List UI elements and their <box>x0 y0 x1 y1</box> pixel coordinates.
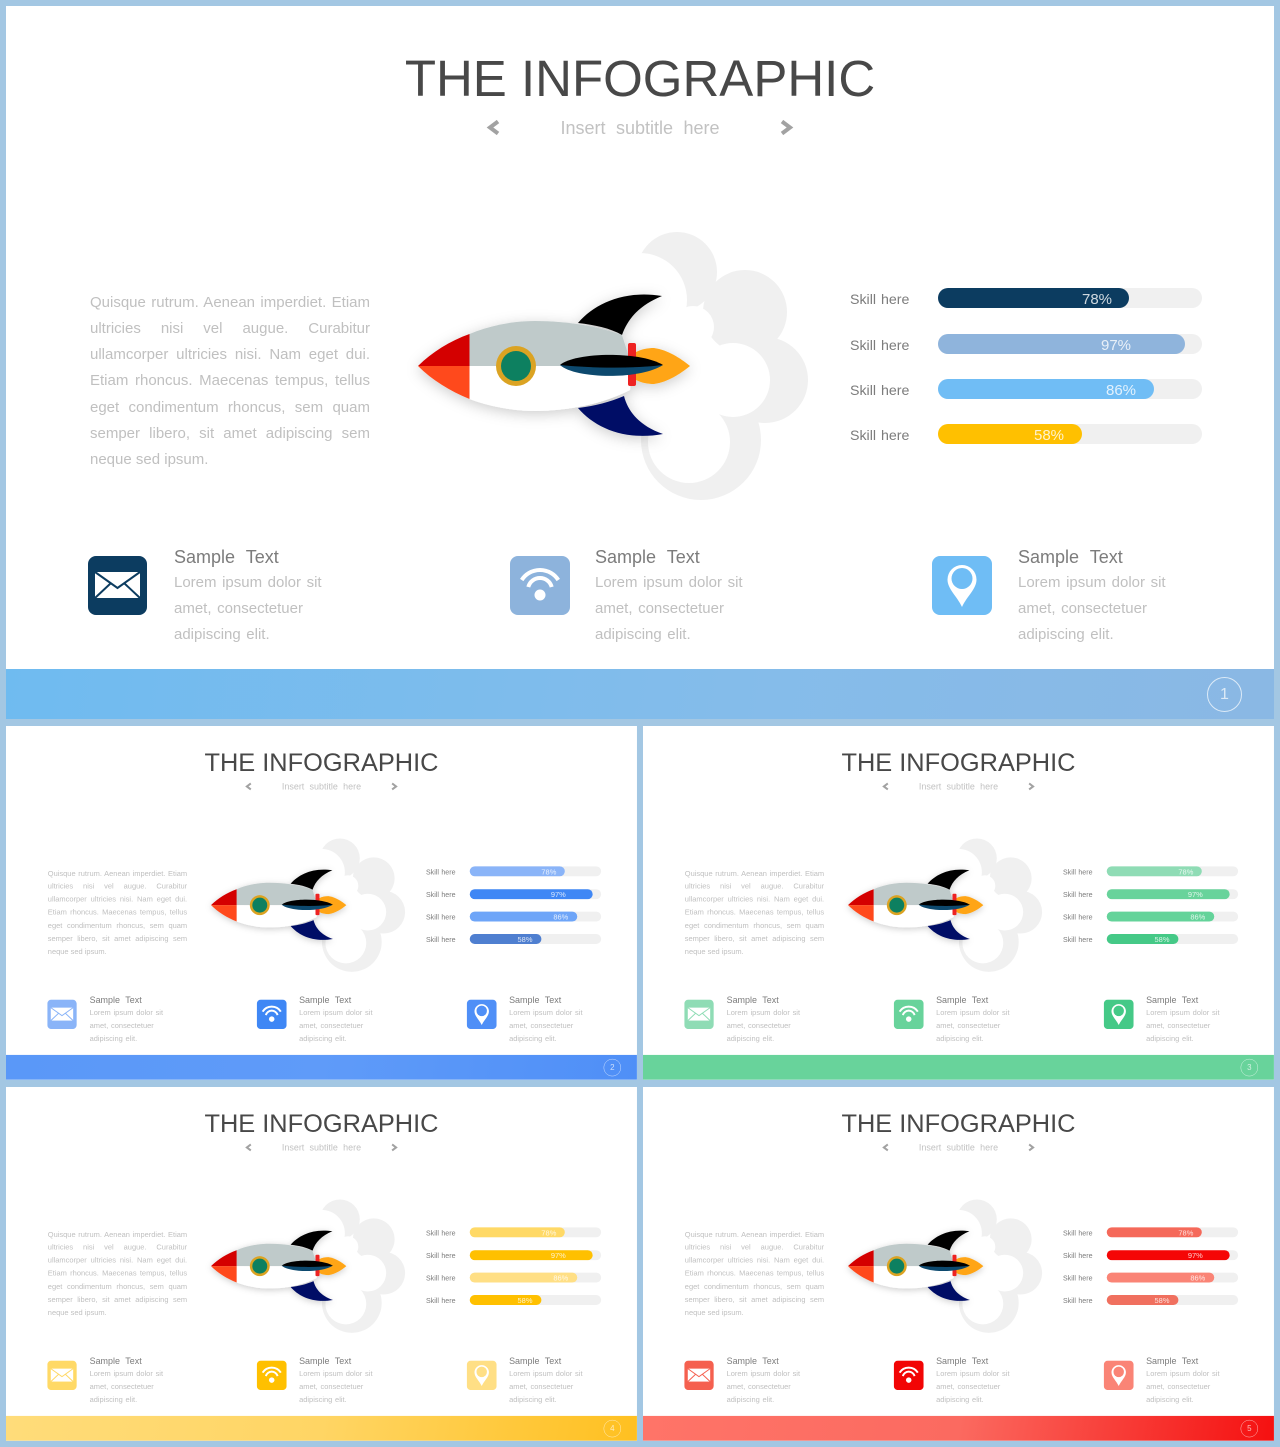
chart: skill bars: Skill here <box>1063 868 1093 876</box>
feature: mail: amet, consectetuer <box>174 600 303 617</box>
text block: intro paragraph: eget condimentum rhoncus, sem quam <box>685 1282 824 1291</box>
text block: intro paragraph: neque sed ipsum. <box>90 451 208 468</box>
text block: intro paragraph: Quisque rutrum. Aenean imperdiet. Etiam <box>685 1230 824 1239</box>
text block: intro paragraph: Etiam rhoncus. Maecenas tempus, tellus <box>685 1269 824 1278</box>
feature: location: amet, consectetuer <box>1146 1022 1210 1030</box>
subtitle: Insert subtitle here <box>560 118 720 138</box>
chart: skill bars: 58% <box>1155 935 1169 944</box>
chart: skill bars: 97% <box>551 1252 566 1260</box>
footer band with page number: 5 <box>1247 1424 1252 1433</box>
feature: wifi: adipiscing elit. <box>936 1035 984 1043</box>
feature: mail: amet, consectetuer <box>727 1383 791 1391</box>
footer band with page number: 1 <box>1220 686 1229 703</box>
feature: wifi <box>894 995 1010 1043</box>
title: THE INFOGRAPHIC <box>841 1109 1075 1137</box>
feature: location: Sample Text <box>1146 995 1198 1005</box>
feature: location: Lorem ipsum dolor sit <box>509 1009 583 1017</box>
feature: wifi <box>256 995 373 1043</box>
feature: location: amet, consectetuer <box>509 1022 573 1030</box>
text block: intro paragraph <box>48 869 187 956</box>
icon: envelope <box>47 1000 77 1029</box>
text block: intro paragraph: ultricies nisi vel augue. Curabitur <box>48 1243 187 1252</box>
text block: intro paragraph <box>685 869 824 956</box>
text block: intro paragraph: Etiam rhoncus. Maecenas tempus, tellus <box>90 372 370 389</box>
chart: skill bars: 58% <box>518 935 532 944</box>
chart: skill bars: Skill here <box>1063 1275 1093 1283</box>
text block: intro paragraph: semper libero, sit amet adipiscing sem <box>48 1295 187 1304</box>
feature: wifi: adipiscing elit. <box>595 626 691 643</box>
feature: location: Sample Text <box>509 1356 561 1366</box>
panel: red slide 5 <box>643 1087 1274 1441</box>
feature: mail: Lorem ipsum dolor sit <box>727 1370 800 1378</box>
chart: skill bars: 58% <box>518 1296 532 1305</box>
text block: intro paragraph: Quisque rutrum. Aenean imperdiet. Etiam <box>48 869 187 878</box>
feature: mail: amet, consectetuer <box>90 1383 154 1391</box>
chart: skill bars <box>426 866 601 944</box>
icon: pin <box>1104 1361 1134 1390</box>
panel: main slide 1 <box>6 6 1274 719</box>
footer band with page number: 4 <box>610 1424 615 1433</box>
feature: wifi: Lorem ipsum dolor sit <box>299 1370 373 1378</box>
feature: mail: Lorem ipsum dolor sit <box>727 1009 800 1017</box>
feature: location: adipiscing elit. <box>1018 626 1114 643</box>
footer band with page number <box>6 1416 637 1441</box>
text block: intro paragraph: eget condimentum rhoncus, sem quam <box>48 1282 187 1291</box>
text block: intro paragraph: Etiam rhoncus. Maecenas tempus, tellus <box>48 1269 187 1278</box>
feature: location: amet, consectetuer <box>509 1383 573 1391</box>
chart: skill bars: 58% <box>1034 427 1064 444</box>
chart: skill bars: 78% <box>541 1229 556 1237</box>
text block: intro paragraph <box>90 294 370 468</box>
icon: wifi <box>256 1000 287 1029</box>
chart: skill bars: 97% <box>1188 891 1203 899</box>
footer band with page number: 2 <box>610 1063 615 1072</box>
feature: location <box>466 1356 583 1404</box>
feature: mail <box>47 995 163 1043</box>
feature: location <box>466 995 583 1043</box>
text block: intro paragraph: ullamcorper ultricies nisi. Nam eget dui. <box>48 895 187 904</box>
illustration: rocket with cloud <box>847 838 1042 972</box>
feature: mail: Sample Text <box>90 1356 142 1366</box>
title: THE INFOGRAPHIC <box>204 1109 438 1137</box>
feature: wifi: Lorem ipsum dolor sit <box>299 1009 373 1017</box>
chart: skill bars: Skill here <box>850 428 909 444</box>
feature: mail: Lorem ipsum dolor sit <box>174 574 322 591</box>
text block: intro paragraph: semper libero, sit amet adipiscing sem <box>90 425 370 442</box>
text block: intro paragraph: ultricies nisi vel augue. Curabitur <box>685 882 824 891</box>
icon: envelope <box>88 556 147 615</box>
footer band with page number <box>6 669 1274 719</box>
text block: intro paragraph: ultricies nisi vel augue. Curabitur <box>685 1243 824 1252</box>
text block: intro paragraph: ullamcorper ultricies nisi. Nam eget dui. <box>685 1256 824 1265</box>
text block: intro paragraph: neque sed ipsum. <box>48 1308 107 1317</box>
feature: mail: Sample Text <box>727 1356 779 1366</box>
text block: intro paragraph: ultricies nisi vel augue. Curabitur <box>48 882 187 891</box>
icon: subtitle chevrons <box>874 1136 1038 1152</box>
text block: intro paragraph: eget condimentum rhoncus, sem quam <box>90 399 370 416</box>
feature: mail <box>88 547 322 643</box>
feature: wifi: Sample Text <box>595 547 700 567</box>
subtitle: Insert subtitle here <box>919 782 998 792</box>
feature: mail: adipiscing elit. <box>727 1035 774 1043</box>
footer band with page number <box>643 1055 1274 1080</box>
text block: intro paragraph: Etiam rhoncus. Maecenas tempus, tellus <box>48 908 187 917</box>
feature: mail: Lorem ipsum dolor sit <box>90 1009 163 1017</box>
chart: skill bars: Skill here <box>1063 914 1093 922</box>
feature: location: amet, consectetuer <box>1146 1383 1210 1391</box>
illustration: rocket with cloud <box>210 838 405 972</box>
chart: skill bars: Skill here <box>1063 936 1093 944</box>
chart: skill bars: Skill here <box>426 1252 456 1260</box>
feature: mail: Sample Text <box>174 547 279 567</box>
text block: intro paragraph <box>48 1230 187 1317</box>
subtitle: Insert subtitle here <box>282 1143 361 1153</box>
icon: envelope <box>684 1000 714 1029</box>
footer band with page number: 3 <box>1247 1063 1252 1072</box>
icon: subtitle chevrons <box>245 782 398 790</box>
chart: skill bars: 86% <box>1190 913 1205 922</box>
text block: intro paragraph: eget condimentum rhoncus, sem quam <box>685 921 824 930</box>
icon: wifi <box>510 556 570 615</box>
chart: skill bars: 97% <box>1188 1252 1203 1260</box>
feature: location <box>1104 1356 1263 1408</box>
text block: intro paragraph: semper libero, sit amet adipiscing sem <box>685 934 824 943</box>
title: THE INFOGRAPHIC <box>405 50 875 106</box>
feature: mail: amet, consectetuer <box>90 1022 154 1030</box>
feature: mail <box>47 1356 163 1404</box>
chart: skill bars: 78% <box>1178 1229 1193 1237</box>
feature: location: amet, consectetuer <box>1018 600 1147 617</box>
chart: skill bars: Skill here <box>426 936 456 944</box>
title: THE INFOGRAPHIC <box>204 748 438 776</box>
chart: skill bars <box>1061 1226 1245 1308</box>
panel: blue slide 2 <box>6 726 637 1080</box>
text block: intro paragraph: ultricies nisi vel augue. Curabitur <box>90 320 370 337</box>
feature: wifi: adipiscing elit. <box>299 1396 347 1404</box>
feature: mail: Lorem ipsum dolor sit <box>90 1370 163 1378</box>
icon: subtitle chevrons <box>245 1144 398 1152</box>
feature: mail: adipiscing elit. <box>90 1396 137 1404</box>
feature: wifi <box>256 1356 373 1404</box>
feature: wifi: Lorem ipsum dolor sit <box>936 1370 1010 1378</box>
text block: intro paragraph: neque sed ipsum. <box>685 947 744 956</box>
chart: skill bars: Skill here <box>426 891 456 899</box>
chart: skill bars: Skill here <box>426 868 456 876</box>
feature: wifi: adipiscing elit. <box>299 1035 347 1043</box>
chart: skill bars: 58% <box>1155 1296 1169 1305</box>
illustration: rocket with cloud <box>416 232 808 500</box>
text block: intro paragraph: Etiam rhoncus. Maecenas tempus, tellus <box>685 908 824 917</box>
text block: intro paragraph: ullamcorper ultricies nisi. Nam eget dui. <box>48 1256 187 1265</box>
chart: skill bars: 97% <box>1101 337 1131 354</box>
chart: skill bars: 86% <box>1106 382 1136 399</box>
subtitle: Insert subtitle here <box>282 782 361 792</box>
feature: wifi: adipiscing elit. <box>936 1396 984 1404</box>
footer band with page number <box>643 1416 1274 1441</box>
chart: skill bars: Skill here <box>850 338 909 354</box>
feature: wifi <box>510 547 743 643</box>
feature: location: adipiscing elit. <box>1146 1396 1194 1404</box>
chart: skill bars: 86% <box>553 1274 568 1283</box>
feature: location: Lorem ipsum dolor sit <box>509 1370 583 1378</box>
icon: wifi <box>256 1360 287 1390</box>
chart: skill bars: Skill here <box>1063 891 1093 899</box>
chart: skill bars <box>1063 866 1238 944</box>
feature: mail: Sample Text <box>727 995 779 1005</box>
chart: skill bars: 78% <box>1082 291 1112 308</box>
feature: location: Sample Text <box>509 995 561 1005</box>
feature: location: Sample Text <box>1018 547 1123 567</box>
icon: wifi <box>894 1361 924 1390</box>
feature: wifi: amet, consectetuer <box>936 1022 1000 1030</box>
feature: location: Lorem ipsum dolor sit <box>1146 1009 1220 1017</box>
illustration: rocket with cloud <box>839 1193 1053 1343</box>
feature: wifi: Sample Text <box>299 1356 351 1366</box>
chart: skill bars <box>426 1227 601 1305</box>
text block: intro paragraph: neque sed ipsum. <box>685 1308 744 1317</box>
feature: location <box>932 547 1166 643</box>
icon: pin <box>466 1360 497 1390</box>
text block: intro paragraph: Quisque rutrum. Aenean imperdiet. Etiam <box>90 294 370 311</box>
icon: pin <box>932 556 992 615</box>
chart: skill bars: Skill here <box>426 1297 456 1305</box>
text block: intro paragraph <box>685 1228 824 1320</box>
chart: skill bars: 86% <box>1190 1274 1205 1283</box>
panel: yellow slide 4 <box>6 1087 637 1441</box>
chart: skill bars: Skill here <box>426 1275 456 1283</box>
feature: mail <box>684 1356 844 1408</box>
text block: intro paragraph: semper libero, sit amet adipiscing sem <box>685 1295 824 1304</box>
feature: mail: Sample Text <box>90 995 142 1005</box>
icon: pin <box>466 1000 497 1029</box>
feature: mail <box>684 995 800 1043</box>
feature: wifi: amet, consectetuer <box>595 600 724 617</box>
text block: intro paragraph: Quisque rutrum. Aenean imperdiet. Etiam <box>685 869 824 878</box>
icon: subtitle chevrons <box>882 782 1035 790</box>
chart: skill bars: Skill here <box>1063 1229 1093 1237</box>
chart: skill bars: Skill here <box>850 383 909 399</box>
chart: skill bars: Skill here <box>1063 1297 1093 1305</box>
chart: skill bars: 78% <box>541 868 556 876</box>
feature: wifi: Sample Text <box>299 995 351 1005</box>
icon: pin <box>1104 1000 1134 1029</box>
subtitle: Insert subtitle here <box>919 1143 998 1153</box>
feature: wifi <box>894 1356 1053 1408</box>
text block: intro paragraph: ullamcorper ultricies nisi. Nam eget dui. <box>90 346 370 363</box>
chart: skill bars <box>850 288 1202 444</box>
panel: green slide 3 <box>643 726 1274 1080</box>
feature: location: adipiscing elit. <box>509 1396 557 1404</box>
feature: mail: adipiscing elit. <box>727 1396 774 1404</box>
chart: skill bars: 86% <box>553 913 568 922</box>
illustration: rocket with cloud <box>210 1200 405 1333</box>
feature: wifi: Sample Text <box>936 995 988 1005</box>
feature: mail: amet, consectetuer <box>727 1022 791 1030</box>
feature: mail: adipiscing elit. <box>174 626 270 643</box>
feature: wifi: amet, consectetuer <box>936 1383 1000 1391</box>
title: THE INFOGRAPHIC <box>841 748 1075 776</box>
icon: envelope <box>47 1360 77 1390</box>
feature: wifi: Sample Text <box>936 1356 988 1366</box>
feature: wifi: amet, consectetuer <box>299 1383 363 1391</box>
text block: intro paragraph: neque sed ipsum. <box>48 947 107 956</box>
text block: intro paragraph: eget condimentum rhoncus, sem quam <box>48 921 187 930</box>
feature: location: Lorem ipsum dolor sit <box>1018 574 1166 591</box>
feature: wifi: amet, consectetuer <box>299 1022 363 1030</box>
feature: location: Sample Text <box>1146 1356 1198 1366</box>
chart: skill bars: 97% <box>551 891 566 899</box>
feature: wifi: Lorem ipsum dolor sit <box>936 1009 1010 1017</box>
chart: skill bars: Skill here <box>1063 1252 1093 1260</box>
text block: intro paragraph: Quisque rutrum. Aenean imperdiet. Etiam <box>48 1230 187 1239</box>
icon: subtitle chevrons <box>486 120 794 135</box>
icon: wifi <box>894 1000 924 1029</box>
chart: skill bars: Skill here <box>850 292 909 308</box>
feature: wifi: Lorem ipsum dolor sit <box>595 574 743 591</box>
text block: intro paragraph: ullamcorper ultricies nisi. Nam eget dui. <box>685 895 824 904</box>
feature: mail: adipiscing elit. <box>90 1035 137 1043</box>
chart: skill bars: Skill here <box>426 914 456 922</box>
feature: location <box>1104 995 1220 1043</box>
text block: intro paragraph: semper libero, sit amet adipiscing sem <box>48 934 187 943</box>
feature: location: adipiscing elit. <box>509 1035 557 1043</box>
icon: envelope <box>684 1361 714 1390</box>
footer band with page number <box>6 1055 637 1080</box>
feature: location: adipiscing elit. <box>1146 1035 1194 1043</box>
chart: skill bars: 78% <box>1178 868 1193 876</box>
chart: skill bars: Skill here <box>426 1229 456 1237</box>
feature: location: Lorem ipsum dolor sit <box>1146 1370 1220 1378</box>
